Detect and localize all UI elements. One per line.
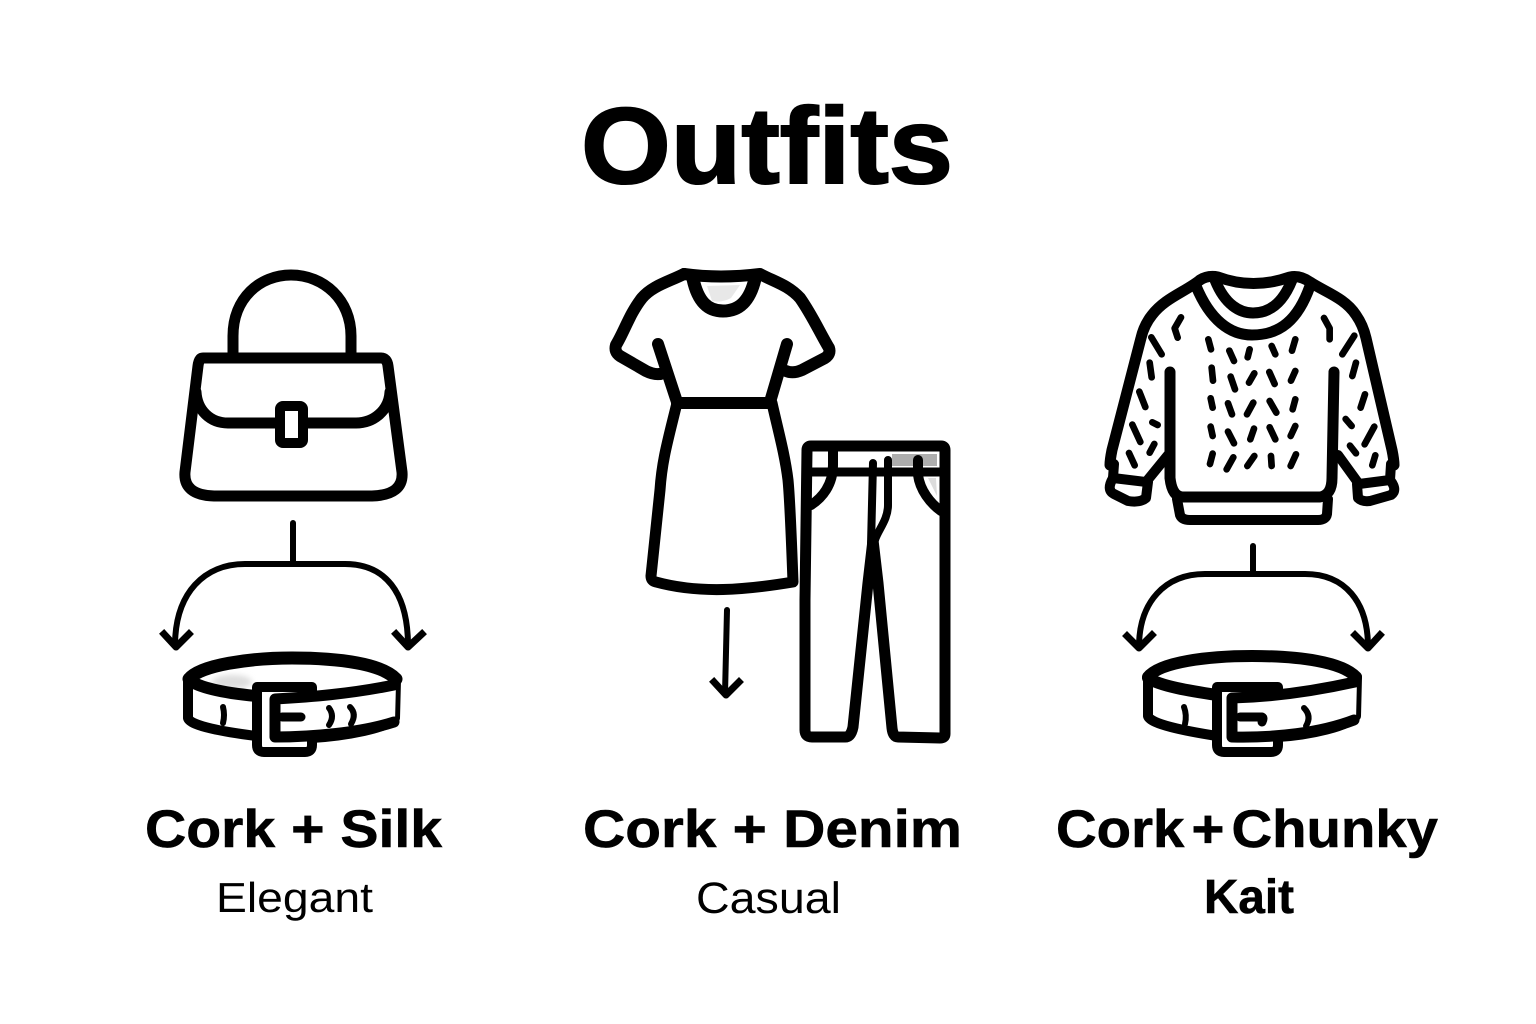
title: Outfits <box>581 85 953 206</box>
icon: sweater <box>1110 276 1394 520</box>
icon: belt <box>188 658 396 752</box>
heading: cork + chunky: Cork + Chunky <box>1056 800 1439 859</box>
panel: cork and denim <box>583 274 962 923</box>
heading: cork + silk: Cork + Silk <box>145 800 443 859</box>
icon: jeans <box>805 446 945 738</box>
knit texture marks <box>1129 317 1375 469</box>
text: casual: Casual <box>696 874 841 923</box>
text: kait: Kait <box>1204 871 1294 924</box>
arrow: split from bag to belt <box>164 523 422 647</box>
panel: cork and chunky knit <box>1056 276 1439 924</box>
panel: cork and silk <box>145 275 443 921</box>
icon: handbag <box>185 275 402 496</box>
icon: belt <box>1148 656 1357 752</box>
text: elegant: Elegant <box>216 874 373 921</box>
heading: cork + denim: Cork + Denim <box>583 800 962 859</box>
icon: dress <box>616 274 830 590</box>
arrow: dress down <box>714 610 739 695</box>
arrow: split from sweater to belt <box>1127 546 1380 648</box>
